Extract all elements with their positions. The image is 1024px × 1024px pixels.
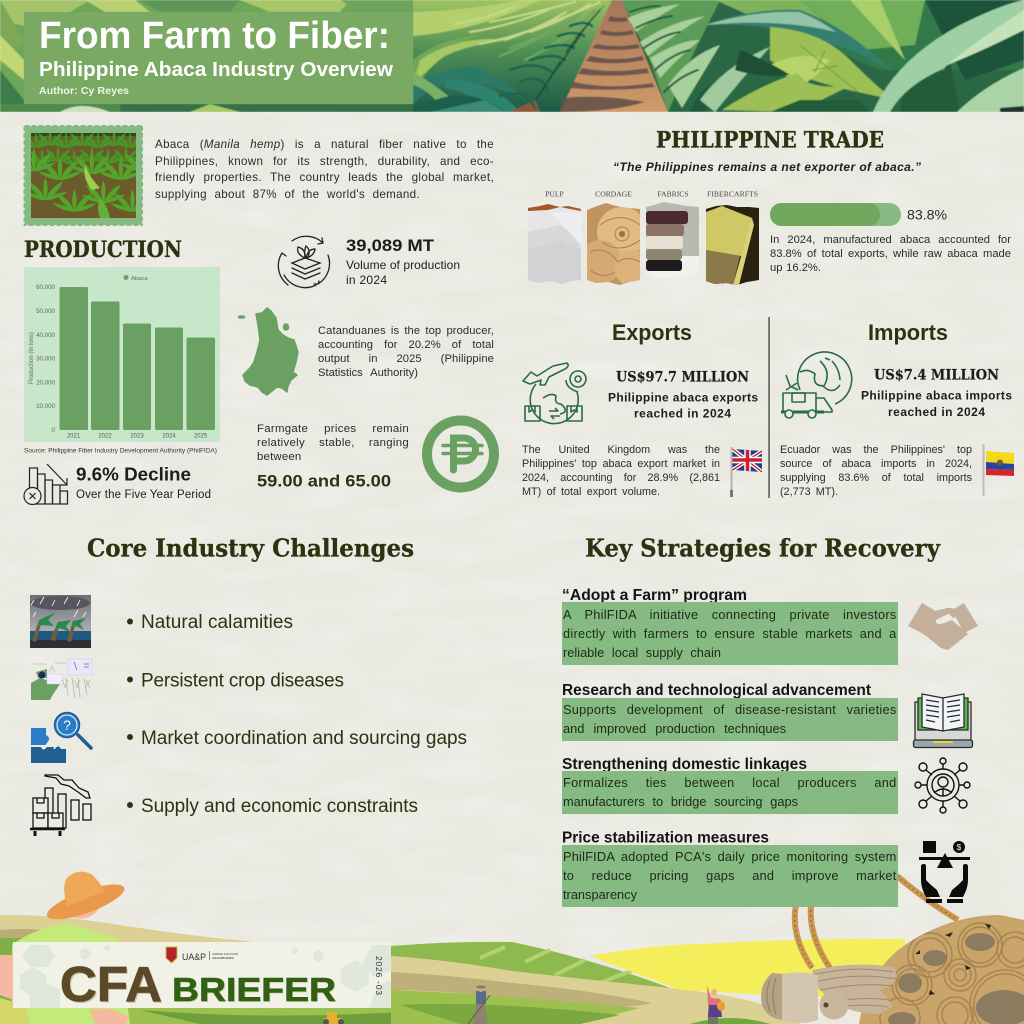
image: fabrics xyxy=(646,200,699,286)
text: UK top market: MT) of total export volume. xyxy=(522,486,660,498)
panel: production xyxy=(24,236,497,504)
BRIEFER wordmark: BRIEFER xyxy=(173,972,337,1009)
strategies heading: Key Strategies for Recovery xyxy=(585,534,941,562)
bar chart: abaca production 2021-2025: 2023 xyxy=(130,434,144,440)
text: manufactured abaca: up 16.2%. xyxy=(770,262,821,274)
UA&P logo xyxy=(166,947,238,963)
image: pulp xyxy=(528,200,581,286)
bar chart: abaca production 2021-2025: 40,000 xyxy=(36,332,56,339)
bar chart: abaca production 2021-2025: Abaca xyxy=(131,276,148,282)
strategy: price stabilization: PhilFIDA adopted PCA's daily price monitoring system xyxy=(563,849,896,864)
icon: puzzle and magnifier: ? xyxy=(63,717,71,733)
woven abaca basket xyxy=(855,910,1024,1024)
text: exports reached xyxy=(608,390,758,420)
stat: 9.6% decline: 9.6% Decline xyxy=(76,464,191,484)
title block xyxy=(24,12,413,104)
production heading: PRODUCTION xyxy=(24,237,182,263)
icon: handshake xyxy=(908,603,978,650)
imports heading: Imports xyxy=(868,320,948,345)
text: farmgate prices: between xyxy=(257,451,301,463)
text: imports reached: Philippine abaca imports xyxy=(861,388,1012,402)
banner: abaca plantation illustration xyxy=(0,0,1024,112)
strategy: adopt a farm: “Adopt a Farm” program xyxy=(562,587,747,604)
panel: exports xyxy=(522,320,762,502)
product labels xyxy=(545,190,758,198)
text: exports reached: reached in 2024 xyxy=(634,406,731,420)
text: exports reached: Philippine abaca exports xyxy=(608,390,758,404)
stat: volume of production: 39,089 MT xyxy=(346,236,435,255)
icon: network of people xyxy=(915,758,970,813)
strategy: price stabilization: transparency xyxy=(563,887,637,902)
challenges heading: Core Industry Challenges xyxy=(87,534,414,562)
panel: core industry challenges xyxy=(30,534,467,836)
intro paragraph: Philippines, known for its strength, durability, and eco- xyxy=(155,155,494,168)
text: top producer: Statistics Authority) xyxy=(318,367,418,379)
text: Ecuador top source: supplying 83.6% of total imports xyxy=(780,472,972,484)
product labels: PULP xyxy=(545,190,564,198)
farmer figure xyxy=(0,859,130,1024)
strategy: price stabilization: to reduce pricing gaps and improve market xyxy=(563,868,896,883)
text: UK top market: 2024, accounting for 28.9% (2,861 xyxy=(522,472,720,484)
yellow field xyxy=(590,939,905,1000)
right green hill xyxy=(391,942,800,1024)
UA&P logo: AND AGRIBUSINESS xyxy=(212,956,234,960)
strategy: adopt a farm: directly with farmers to ensure stable markets and a xyxy=(563,626,896,641)
text: UK top market xyxy=(522,442,723,502)
bar chart: abaca production 2021-2025: 2024 xyxy=(162,434,176,440)
left hills xyxy=(0,915,395,1024)
image: cordage xyxy=(587,203,640,285)
divider xyxy=(768,317,770,498)
trade quote: “The Philippines remains a net exporter of abaca.” xyxy=(613,160,921,174)
strategy: adopt a farm: A PhilFIDA initiative connecting private investors xyxy=(563,607,896,622)
subtitle: Philippine Abaca Industry Overview xyxy=(39,59,393,81)
icon: declining bars xyxy=(24,464,68,504)
map: Catanduanes xyxy=(238,308,298,395)
bar chart: abaca production 2021-2025: 2025 xyxy=(194,434,208,440)
bottom farm illustration xyxy=(0,859,1024,1024)
stat: volume of production: in 2024 xyxy=(346,273,387,287)
stat: volume of production: Volume of production xyxy=(346,258,460,272)
strategy: adopt a farm: reliable local supply chain xyxy=(563,645,721,660)
chart source: Source: Philippine Fiber Industry Development Authority (PhilFIDA) xyxy=(24,448,217,454)
text: manufactured abaca: In 2024, manufactured abaca accounted for xyxy=(770,234,1011,246)
stat: volume of production xyxy=(346,236,460,287)
strategy: research: Supports development of disease-resistant varieties xyxy=(563,702,896,717)
icon: supply constraints xyxy=(30,775,91,836)
bullet: market coordination: Market coordination and sourcing gaps xyxy=(141,728,467,749)
image: fibercrafts xyxy=(706,200,759,286)
text: imports reached xyxy=(861,388,1012,419)
text: top producer: accounting for 20.2% of total xyxy=(318,339,494,351)
text: UK top market: The United Kingdom was the xyxy=(522,444,720,456)
text: Ecuador top source: (2,773 MT). xyxy=(780,486,838,498)
small tractor xyxy=(323,1012,344,1024)
bullet: supply constraints: Supply and economic constraints xyxy=(141,796,418,817)
exports heading: Exports xyxy=(612,320,692,345)
small farmer waving xyxy=(707,985,725,1024)
bar chart: abaca production 2021-2025: 0 xyxy=(52,427,56,434)
bar chart: abaca production 2021-2025: 20,000 xyxy=(36,380,56,386)
text: manufactured abaca: 83.8% of total exports, while raw abaca made xyxy=(770,248,1011,260)
bar chart: abaca production 2021-2025: 10,000 xyxy=(36,403,56,410)
text: top producer: Catanduanes is the top producer, xyxy=(318,325,494,337)
rope strands xyxy=(795,876,958,968)
text: Ecuador top source: Ecuador was the Philippines' top xyxy=(780,444,972,456)
icon: Ecuador flag xyxy=(982,444,1014,496)
icon: harvest cycle xyxy=(278,236,330,288)
icon: hands balancing price: $ xyxy=(957,843,962,852)
progress bar: 83.8% manufactured xyxy=(770,203,901,226)
stat: 9.6% decline xyxy=(76,464,211,501)
bullet: crop diseases: Persistent crop diseases xyxy=(141,670,344,692)
intro paragraph xyxy=(155,137,497,207)
crop rows left of path xyxy=(413,0,614,112)
UA&P logo: UA&P xyxy=(182,952,206,962)
bar chart: abaca production 2021-2025 xyxy=(24,267,220,442)
strategy: domestic linkages: manufacturers to bridge sourcing gaps xyxy=(563,794,798,809)
rope bundle xyxy=(761,964,896,1023)
bar chart: abaca production 2021-2025: Production (in tons) xyxy=(29,332,35,384)
text: top producer: output in 2025 (Philippine xyxy=(318,353,494,365)
text: farmgate prices xyxy=(257,422,412,468)
text: Ecuador top source xyxy=(780,442,975,502)
strategy: price stabilization xyxy=(562,830,899,907)
strategy: research: and improved production techniques xyxy=(563,721,786,736)
UA&P logo: CENTER FOR FOOD xyxy=(212,952,238,956)
strategy: research xyxy=(562,682,899,741)
icon: export plane, globe and boxes xyxy=(523,363,586,424)
bullet: natural calamities: Natural calamities xyxy=(141,612,293,633)
panel: philippine trade xyxy=(522,128,1014,502)
issue number: 2026 -03 xyxy=(374,956,384,995)
main title: From Farm to Fiber: xyxy=(39,15,390,57)
small farmer with rake xyxy=(468,986,490,1024)
text: UK top market: Philippines' top abaca export market in xyxy=(522,458,720,470)
CFA briefer badge xyxy=(13,942,391,1014)
icon: storm xyxy=(30,595,91,648)
icon: UK flag xyxy=(730,447,762,497)
photo stamp: abaca seedlings xyxy=(24,125,143,226)
strategy: domestic linkages: Strengthening domestic linkages xyxy=(562,756,807,773)
intro paragraph: Abaca (Manila hemp) is a natural fiber native to the xyxy=(155,138,494,151)
text: top producer xyxy=(318,324,497,384)
stat: price range: 59.00 and 65.00 xyxy=(257,472,391,490)
product labels: CORDAGE xyxy=(595,190,632,198)
text: imports reached: reached in 2024 xyxy=(888,405,985,419)
stat: 9.6% decline: Over the Five Year Period xyxy=(76,489,211,501)
stat: export value: US$97.7 MILLION xyxy=(616,370,749,386)
CFA wordmark: CFA xyxy=(62,960,164,1014)
bar chart: abaca production 2021-2025: 30,000 xyxy=(36,356,56,362)
panel: key strategies for recovery xyxy=(562,534,978,907)
panel: imports xyxy=(780,320,1014,502)
author: Author: Cy Reyes xyxy=(39,85,129,97)
bar chart: abaca production 2021-2025: 60,000 xyxy=(36,284,56,291)
bar chart: abaca production 2021-2025: 50,000 xyxy=(36,308,56,315)
icon: crop disease xyxy=(31,659,92,700)
intro paragraph: friendly properties. The country leads the global market, xyxy=(155,171,494,184)
stat: 83.8%: 83.8% xyxy=(907,206,947,222)
icon: puzzle and magnifier xyxy=(31,712,91,763)
bar chart: abaca production 2021-2025: 2021 xyxy=(67,434,81,440)
BRIEFER wordmark: BRIEFER xyxy=(172,971,336,1008)
text: farmgate prices: Farmgate prices remain xyxy=(257,423,409,435)
strategy: price stabilization: Price stabilization measures xyxy=(562,830,769,846)
strategy: research: Research and technological advancement xyxy=(562,682,871,699)
stat: import value: US$7.4 MILLION xyxy=(874,368,999,384)
strategy: domestic linkages: Formalizes ties between local producers and xyxy=(563,775,896,790)
bar chart: abaca production 2021-2025: 2022 xyxy=(98,434,112,440)
icon: book on laptop xyxy=(914,694,972,748)
trade heading: PHILIPPINE TRADE xyxy=(656,128,884,154)
CFA wordmark: CFA xyxy=(60,958,162,1012)
crop rows right of path xyxy=(622,0,1024,112)
dirt path xyxy=(560,0,668,112)
strategy: adopt a farm xyxy=(562,587,899,665)
product labels: FABRICS xyxy=(657,190,689,198)
text: Ecuador top source: source of abaca imports in 2024, xyxy=(780,458,972,470)
icon: import globe and truck xyxy=(781,352,852,418)
strategy: domestic linkages xyxy=(562,756,899,814)
icon: hands balancing price xyxy=(919,841,970,903)
intro paragraph: supplying about 87% of the world's demand. xyxy=(155,188,420,201)
icon: peso coin xyxy=(427,420,494,488)
text: farmgate prices: relatively stable, ranging xyxy=(257,437,409,449)
product labels: FIBERCARFTS xyxy=(707,190,758,198)
text: manufactured abaca xyxy=(770,233,1014,279)
